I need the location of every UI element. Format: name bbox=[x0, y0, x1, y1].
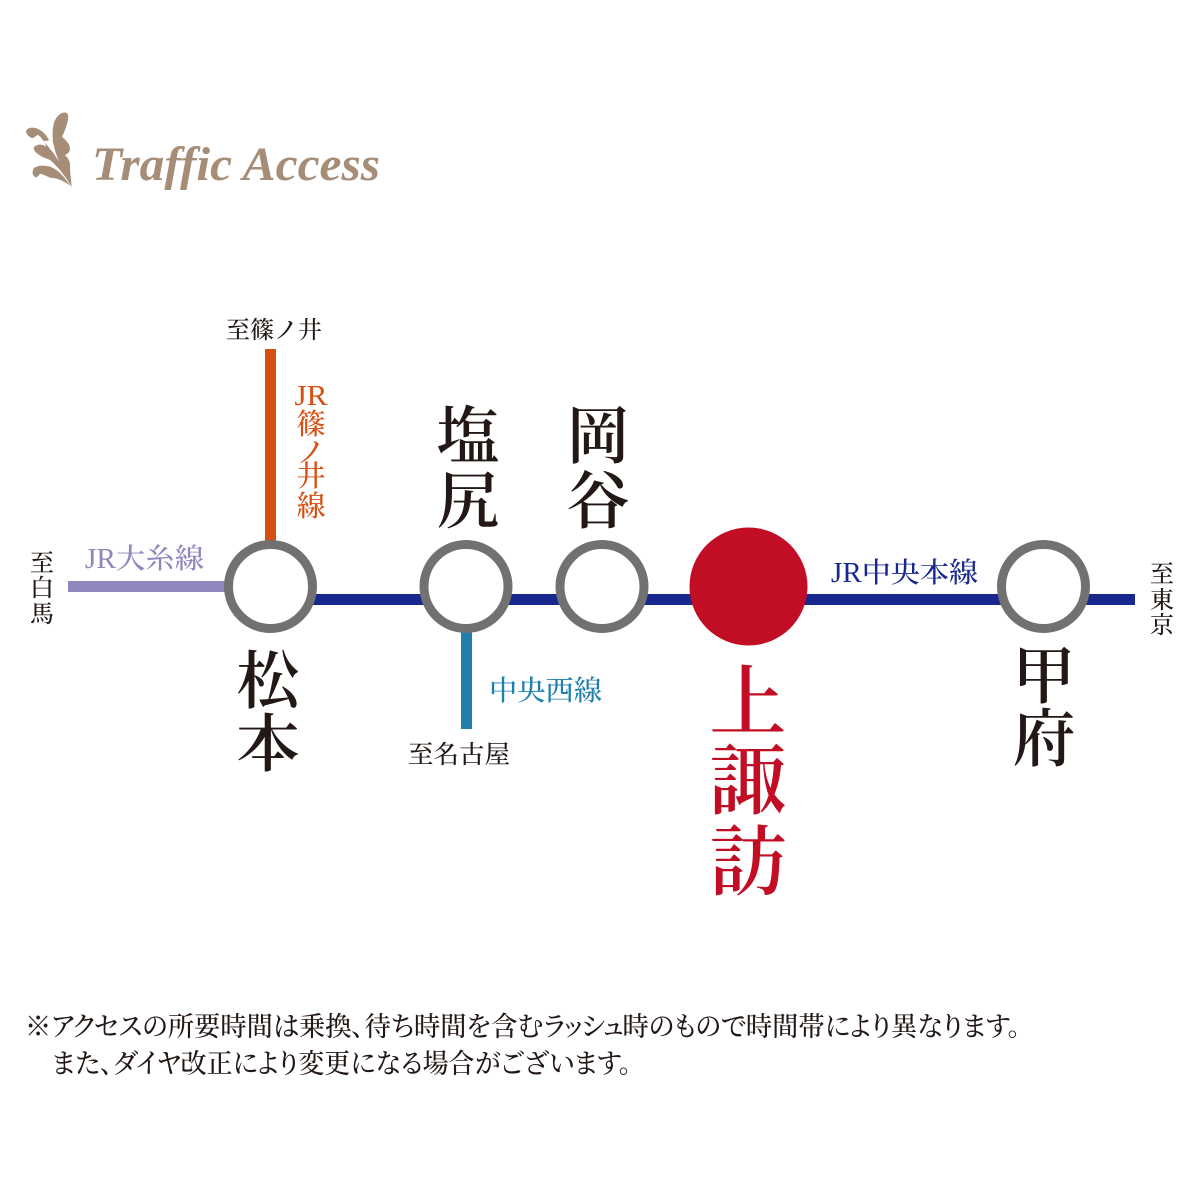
footnote bbox=[25, 1012, 1021, 1079]
station name: Kami-Suwa bbox=[710, 660, 786, 906]
footnote: ※アクセスの所要時間は乗換、待ち時間を含むラッシュ時のもので時間帯により異なります。 bbox=[25, 1012, 1021, 1042]
station name: Kami-Suwa: 諏 bbox=[710, 739, 786, 825]
destination: to Tokyo bbox=[1150, 561, 1174, 639]
station name: Kofu: 府 bbox=[1012, 705, 1076, 775]
station name: Shiojiri bbox=[436, 402, 500, 537]
station name: Kofu: 甲 bbox=[1012, 642, 1076, 712]
destination: to Tokyo: 至 bbox=[1150, 561, 1174, 588]
station marker: Okaya bbox=[560, 544, 644, 628]
station name: Shiojiri: 尻 bbox=[436, 467, 500, 537]
destination: to Nagoya: 至名古屋 bbox=[408, 741, 510, 769]
destination: to Hakuba: 馬 bbox=[30, 601, 54, 628]
station name: Okaya bbox=[566, 402, 630, 537]
station name: Kami-Suwa: 訪 bbox=[710, 820, 786, 906]
label: JR Shinonoi line bbox=[294, 381, 328, 523]
station name: Okaya: 谷 bbox=[566, 467, 630, 537]
label: JR Chuo Main line: JR中央本線 bbox=[831, 557, 978, 589]
station marker: Matsumoto bbox=[228, 544, 312, 628]
destination: to Shinonoi: 至篠ノ井 bbox=[226, 317, 322, 344]
footnote: また、ダイヤ改正により変更になる場合がございます。 bbox=[52, 1049, 632, 1079]
label: Chuo West line: 中央西線 bbox=[489, 675, 602, 707]
station name: Kofu bbox=[1012, 642, 1076, 775]
station name: Matsumoto bbox=[236, 647, 302, 780]
destination: to Hakuba bbox=[30, 550, 54, 628]
label: JR Shinonoi line: ノ bbox=[296, 437, 326, 469]
line: Chuo West line bbox=[461, 630, 472, 729]
label: JR Shinonoi line: JR bbox=[294, 381, 328, 412]
destination: to Hakuba: 白 bbox=[30, 575, 54, 602]
destination: to Tokyo: 東 bbox=[1150, 587, 1174, 614]
icon: leaf ornament bbox=[26, 113, 72, 187]
title: Traffic Access bbox=[92, 138, 380, 191]
line: JR Chuo Main line bbox=[312, 594, 1135, 605]
station name: Okaya: 岡 bbox=[566, 402, 630, 472]
station name: Matsumoto: 本 bbox=[236, 710, 300, 780]
station name: Matsumoto: 松 bbox=[236, 647, 302, 717]
station marker: Kami-Suwa bbox=[690, 528, 808, 646]
station marker: Kofu bbox=[1002, 544, 1086, 628]
destination: to Hakuba: 至 bbox=[30, 550, 54, 577]
station name: Shiojiri: 塩 bbox=[436, 402, 500, 472]
station name: Kami-Suwa: 上 bbox=[710, 660, 786, 746]
label: JR Shinonoi line: 井 bbox=[296, 460, 326, 493]
destination: to Tokyo: 京 bbox=[1150, 612, 1174, 639]
label: JR Oito line: JR大糸線 bbox=[85, 543, 204, 575]
station marker: Shiojiri bbox=[424, 544, 508, 628]
line: JR Oito line bbox=[68, 581, 228, 592]
line: JR Shinonoi line bbox=[265, 349, 276, 544]
label: JR Shinonoi line: 線 bbox=[296, 490, 326, 523]
label: JR Shinonoi line: 篠 bbox=[296, 408, 326, 441]
